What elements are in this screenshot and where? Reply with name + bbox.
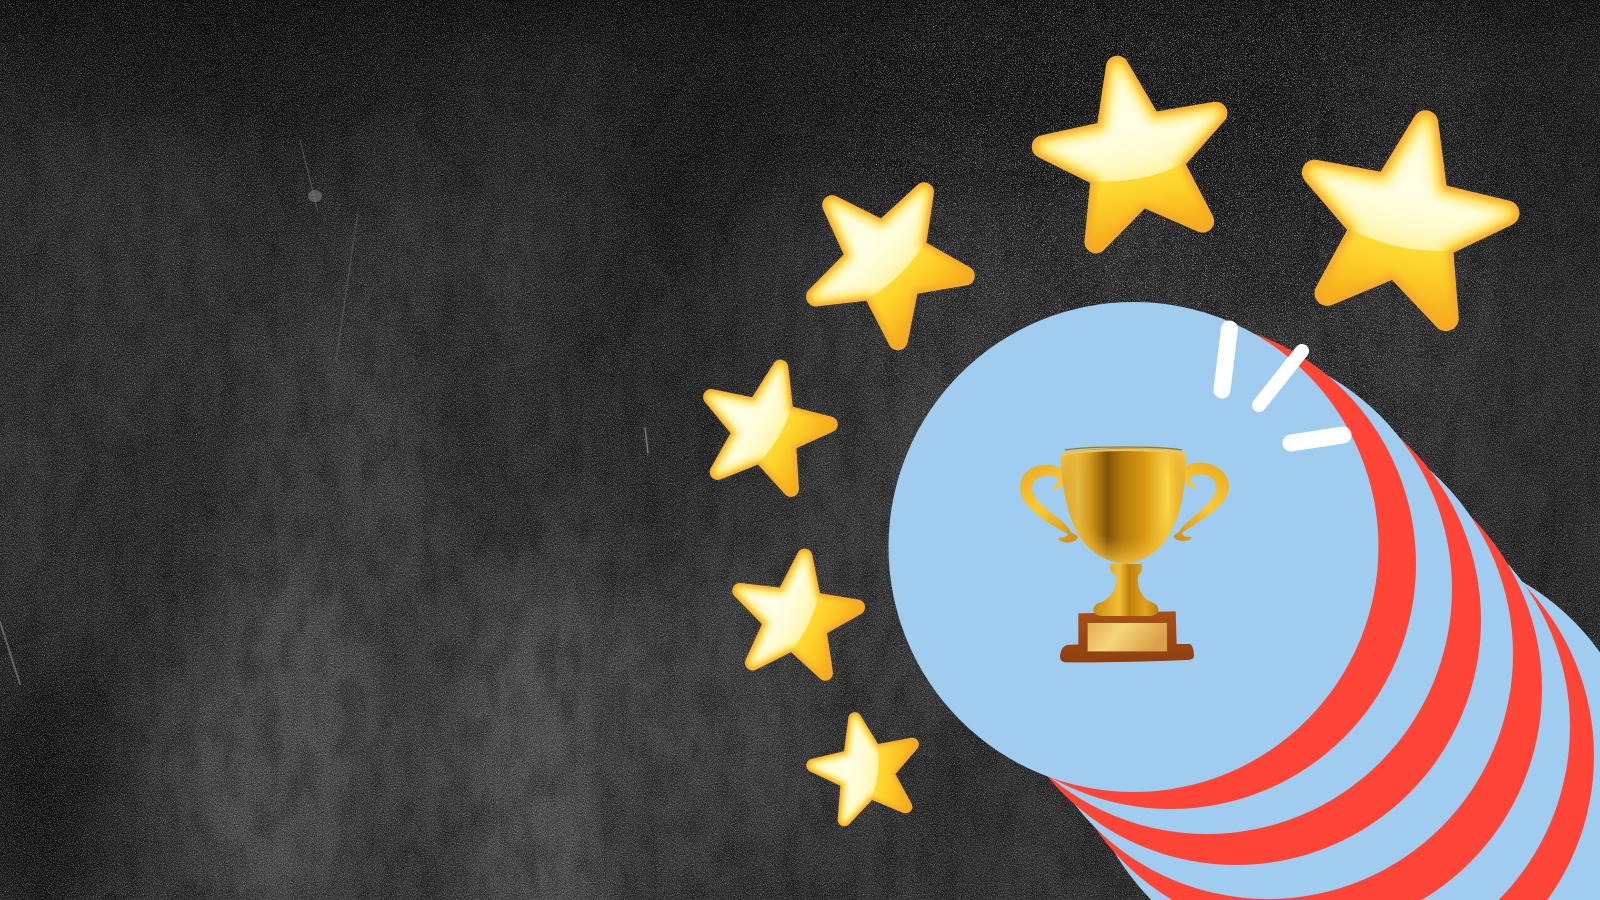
icon: star middle left <box>680 345 842 509</box>
icon: gold trophy <box>1021 447 1228 662</box>
icon: white sparkle ticks <box>1222 329 1343 443</box>
icon: star top <box>1031 50 1236 248</box>
icon: star small bottom <box>808 715 914 826</box>
main blue circle <box>888 302 1378 792</box>
trophy plaque <box>1087 623 1167 652</box>
trophy cup <box>1061 448 1186 564</box>
trophy handles <box>1021 464 1228 541</box>
icon: star upper left <box>778 153 986 360</box>
icon: star right large <box>1291 103 1521 326</box>
trailing striped circles <box>926 319 1600 900</box>
trophy stem and foot <box>1093 564 1158 616</box>
icon: star lower left <box>714 537 867 693</box>
icon: stars arc <box>680 50 1521 826</box>
trophy base wood <box>1060 611 1194 662</box>
